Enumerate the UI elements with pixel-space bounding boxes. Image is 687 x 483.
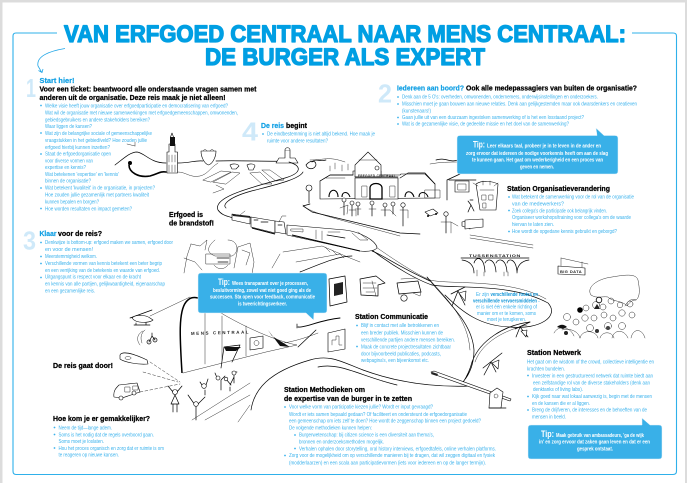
text block 4: de reis begint: De reis [261, 121, 284, 130]
building: mens centraal [150, 297, 297, 373]
text block: station methodieken: Verhalen ophalen door storytelling, oral history interviews, erfgoedtafels, online verhalen platforms. [299, 446, 496, 452]
text block: station methodieken: (modderlaarzen) en een scala aan participatievormen (iets voor iedereen en op de langer termijn). [289, 460, 486, 466]
text block 1: start hier: Wat betekent 'kwaliteit' in de organisatie, in projecten? [45, 186, 155, 192]
building: mens centraal: MENS CENTRAAL [191, 329, 249, 336]
text block: station organisatieverandering: Station Organisatieverandering [507, 184, 610, 193]
text block 1: start hier: Voor een ticket: beantwoord alle onderstaande vragen samen met [40, 84, 257, 94]
text block: station communicatie: door bijvoorbeeld publicaties, podcasts, [361, 351, 441, 357]
text block 1: start hier: erfgoed hierbij kunnen inzetten? [45, 145, 110, 151]
text block 1: start hier: Staat de erfgoedorganisatie open [45, 152, 111, 158]
text block: hoe kom je er gemakkelijker [53, 414, 164, 459]
title: DE BURGER ALS EXPERT [205, 44, 485, 71]
text block: hoe kom je er gemakkelijker: te reageren op nieuwe kansen. [58, 453, 119, 459]
lower road [251, 333, 470, 410]
text block: station netwerk: Station Netwerk [527, 348, 582, 357]
tip bubble: network: in' en zorg ervoor dat zaken gaan leven en dat er een [539, 440, 650, 446]
text block 1: start hier [26, 73, 257, 212]
callout: routes en vervoersmiddelen [473, 292, 540, 323]
tip bubble: organisation: zorg ervoor dat iedereen de nodige voorkennis heeft om aan de slag [466, 151, 608, 157]
text block: station methodieken: Burgerwetenschap: bij citizen science is een diversiteit aan thema's, [299, 433, 434, 439]
text block 1: start hier: anderen uit de organisatie. Deze reis maak je niet alleen! [40, 93, 226, 102]
text block 1: start hier: Waar liggen de kansen? [45, 124, 92, 130]
text block 3: klaar voor de reis: Klaar [40, 229, 57, 238]
text block: station organisatieverandering: Hoe wordt de opgedane kennis gebruikt en geborgd? [512, 229, 617, 235]
text block 1: start hier: binnen de organisatie? [45, 179, 91, 185]
text block: station methodieken: Wordt er iets samen bepaald gedaan? Of faciliteert en ondersteunt de erfgoedorganisatie [289, 412, 467, 418]
crowd network [554, 275, 645, 338]
tip bubble: organisation: Tip: [473, 140, 485, 150]
text block 2: iedereen aan boord: Denk aan de 5 O's: overheden, omwonenden, ondernemers, onderwijsinstellingen en onderzoekers. [402, 95, 598, 101]
text block: station communicatie: verschillende partijen andere mensen bereiken. [361, 337, 455, 343]
text block 1: start hier: 1 [26, 73, 36, 103]
text block: hoe kom je er gemakkelijker: Soms moet je loslaten. [58, 439, 104, 445]
text block 2: iedereen aan boord: Wat is de gezamenlijke visie, de gedeelde missie en het doel van de samenwerking? [402, 122, 569, 128]
viaduct [461, 254, 529, 276]
main road [217, 162, 552, 384]
station building: ERFGOED CENTRAAL [358, 174, 396, 178]
text block 3: klaar voor de reis: Denkwijze is bottom-up: erfgoed maken we samen, erfgoed door [45, 240, 173, 246]
big data sign [558, 258, 588, 275]
big data sign: BIG DATA [560, 269, 582, 274]
text block: station methodieken: De volgende methodieken kunnen helpen: [289, 426, 372, 432]
callout: routes en vervoersmiddelen: verschillende routes en [490, 292, 538, 298]
text block 3: klaar voor de reis: 3 [23, 226, 36, 256]
text block: station organisatieverandering: van de medewerkers? [512, 202, 564, 208]
title: VAN ERFGOED CENTRAAL NAAR MENS CENTRAAL: [64, 21, 626, 48]
text block 4: de reis begint: De eindbestemming is niet altijd bekend. Hoe maak je [267, 132, 375, 138]
road direction signs [451, 287, 530, 375]
text block 1: start hier: voor diverse vormen van [45, 158, 93, 164]
text block 1: start hier: gebiedsgebruikers en andere stakeholders bereiken? [45, 118, 150, 124]
text block: hoe kom je er gemakkelijker: Neem de tijd—lange adem. [58, 426, 112, 432]
text block 4: de reis begint: 4 [242, 116, 259, 146]
tip bubble: organisation [457, 128, 618, 174]
text block: hoe kom je er gemakkelijker: Soms is het nodig dat de regels overboord gaan. [58, 432, 154, 438]
runway fields [203, 164, 284, 193]
text block: hoe kom je er gemakkelijker: Hou het proces organisch en zorg dat er ruimte is om [58, 446, 164, 452]
tip bubble: organisation: Leer elkaars taal, probeer je in te leven in de ander en [487, 144, 601, 150]
text block 1: start hier: vraagstukken in het gebied/veld? Hoe zouden jullie [45, 138, 147, 144]
text block 3: klaar voor de reis: en kennis van alle partijen, gelijkwaardigheid, eigenaarschap [45, 282, 165, 288]
text block 1: start hier: Hoe worden resultaten en impact gemeten? [45, 206, 132, 212]
booths near communication station [297, 276, 421, 352]
text block: station communicatie: Maak de concrete projectresultaten zichtbaar [361, 344, 451, 350]
station building [306, 152, 490, 203]
tip bubble: network: Maak gebruik van ambassadeurs, 'ga de wijk [556, 433, 644, 439]
text block: station methodieken: Voor welke vorm van participatie kiezen jullie? Wordt er input gevraagd? [289, 405, 433, 411]
text block 3: klaar voor de reis: en een gezamenlijke reis. [45, 289, 95, 295]
text block 3: klaar voor de reis [23, 226, 173, 295]
text block 2: iedereen aan boord: Iedereen aan boord? [397, 84, 464, 93]
text block 2: iedereen aan boord: Ook alle medepassagiers van buiten de organisatie? [466, 84, 637, 93]
organisation building and kiosk [447, 174, 498, 229]
viaduct: TUSSENSTATION [469, 254, 521, 258]
text block: station communicatie: webpagina's, een bijeenkomst etc. [360, 358, 429, 364]
tip bubble: communication: Tip: [218, 277, 230, 287]
text block 1: start hier: Welke visie heeft jouw organisatie over erfgoedparticipatie en democratisering van erfgoed? [45, 104, 228, 110]
text block: station organisatieverandering: Zoek collega's die participatie ook belangrijk vinden. [512, 208, 607, 214]
text block: station methodieken: Station Methodieken om [284, 385, 365, 394]
text block 3: klaar voor de reis: Verschillende vormen van kennis betekent een beter begrip [45, 261, 162, 267]
text block 3: klaar voor de reis: Uitgangspunt is respect voor elkaar en de kracht [45, 275, 141, 281]
text block 4: de reis begint: ruimte voor andere resultaten? [267, 139, 328, 145]
text block 1: start hier: Wat betekenen 'expertise' en 'kennis' [45, 172, 119, 178]
text block 1: start hier: Hoe zouden jullie gezamenlijk met partners kwaliteit [45, 193, 149, 199]
text block 2: iedereen aan boord: Gaan jullie uit van een duurzaam ingestoken samenwerking of is het een losstaand project? [402, 115, 584, 121]
text block: station methodieken: Zorg voor de mogelijkheid om op verschillende manieren bij te dragen, dat wil zeggen digitaal en fysiek [289, 453, 495, 459]
text block: station organisatieverandering: Wat betekent de samenwerking voor de rol van de organisatie [512, 195, 634, 201]
callout: routes en vervoersmiddelen: manier om er te komen, soms [477, 311, 536, 317]
text block: station netwerk [527, 348, 654, 421]
callout: erfgoed is de brandstof: de brandstof! [169, 218, 214, 228]
cheering crowd at the building [168, 371, 250, 422]
barrier [431, 371, 511, 408]
text block: station communicatie: een breder publiek. Misschien kunnen de [361, 331, 443, 337]
tip bubble: network [528, 418, 662, 459]
tip bubble: communication [198, 273, 327, 320]
tip bubble: network: Tip: [541, 429, 554, 439]
text block: station netwerk: denktanks of living labs). [533, 387, 583, 393]
text block: station methodieken: de expertise van de burger in te zetten [284, 394, 412, 403]
text block 2: iedereen aan boord [378, 78, 637, 128]
tip bubble: communication: besluitvorming, zowel wat niet goed ging als de [213, 288, 311, 294]
callout: de reis gaat door: De reis gaat door! [53, 361, 113, 370]
tip bubble: organisation: te kunnen gaan. Het gaat om wederkerigheid en een proces van [472, 158, 603, 164]
text block 1: start hier: Wat zijn de belangrijke sociale of gemeenschappelijke [45, 131, 152, 137]
travellers on the platform [340, 198, 474, 233]
rail bridge and tent [272, 246, 430, 281]
text block 1: start hier: Wat wil de organisatie met nieuwe samenwerkingen met erfgoedgemeenschappen, omwonenden, [45, 110, 238, 116]
illustration: landscape and journey [114, 133, 645, 422]
train [232, 211, 377, 251]
title [64, 21, 626, 71]
text block 1: start hier: Start hier! [40, 76, 74, 85]
text block 2: iedereen aan boord: 2 [378, 78, 392, 108]
text block: hoe kom je er gemakkelijker: Hoe kom je er gemakkelijker? [53, 414, 150, 423]
text block: station organisatieverandering: Organiseer workshops/training voor collega's om de waarde [512, 215, 631, 221]
callout: routes en vervoersmiddelen: - [538, 299, 540, 305]
text block 3: klaar voor de reis: en een verrijking van de betekenis en waarde van erfgoed. [45, 268, 160, 274]
callout: erfgoed is de brandstof: Erfgoed is [169, 210, 203, 219]
tip bubble: organisation: geven en nemen. [520, 165, 554, 171]
callout: erfgoed is de brandstof [169, 210, 214, 228]
horizon with tower and ships [115, 133, 458, 176]
tip bubble: communication: successen. Sta open voor feedback, communicatie [210, 295, 315, 301]
callout: routes en vervoersmiddelen: moet je terugkeren. [487, 317, 526, 323]
text block 1: start hier: expertise en kennis? [45, 165, 86, 171]
text block: station communicatie: Station Communicatie [355, 312, 428, 321]
text block: station netwerk: Investeer in een gestructureerd netwerk dat ruimte biedt aan [532, 373, 653, 379]
callout: routes en vervoersmiddelen: Er zijn [476, 292, 489, 298]
text block 3: klaar voor de reis: Meerstemmigheid welkom. [45, 254, 97, 260]
text block: station methodieken: een gemeenschap om iets zelf te doen? Hoe wordt de zeggenschap binnen een project gedoeld? [289, 418, 481, 424]
text block: station netwerk: Breng de drijfveren, de interesses en de behoeften van de [532, 408, 647, 414]
text block: station communicatie [355, 312, 455, 364]
text block: station netwerk: Het gaat om de wisdom of the crowd, collectieve intelligentie en [527, 360, 654, 366]
text block 1: start hier: kunnen bepalen en borgen? [45, 199, 99, 205]
helicopter, bike, limousine, camper [114, 310, 180, 400]
text block: station organisatieverandering [507, 184, 634, 235]
market stalls [184, 240, 254, 274]
callout: routes en vervoersmiddelen: er is niet één enkele richting of [476, 305, 537, 311]
text block 2: iedereen aan boord: (kunstenaars!) [402, 108, 431, 114]
text block 4: de reis begint: begint [286, 121, 308, 130]
text block: station netwerk: en de kansen die er al liggen. [532, 401, 590, 407]
text block: station netwerk: een zelfstandige rol van de diverse stakeholders (denk aan [533, 380, 650, 386]
text block: station netwerk: Kijk goed naar wat lokaal aanwezig is, begin met de mensen [532, 394, 652, 400]
tip bubble: communication: is tweerichtingsverkeer. [238, 302, 287, 308]
text block: station methodieken [284, 385, 496, 466]
text block 3: klaar voor de reis: en voor de mensen! [45, 247, 93, 253]
text block: station netwerk: krachten bundelen. [527, 367, 565, 373]
text block 3: klaar voor de reis: voor de reis? [58, 229, 102, 238]
text block 4: de reis begint [242, 116, 375, 146]
arrow: start here [38, 48, 65, 72]
text block: station methodieken: bronnen en onderzoeksmethoden mogelijk. [299, 439, 384, 445]
text block: station organisatieverandering: hiervan te laten zien. [512, 222, 554, 228]
text block: station communicatie: Blijf in contact met alle betrokkenen en [361, 323, 439, 329]
tip bubble: communication: Wees transparant over je processen, [232, 281, 308, 287]
text block: station netwerk: mensen in beeld. [532, 415, 566, 421]
tip bubble: network: gesprek ontstaat. [577, 446, 613, 452]
callout: routes en vervoersmiddelen: verschillende vervoersmiddelen [473, 299, 537, 305]
